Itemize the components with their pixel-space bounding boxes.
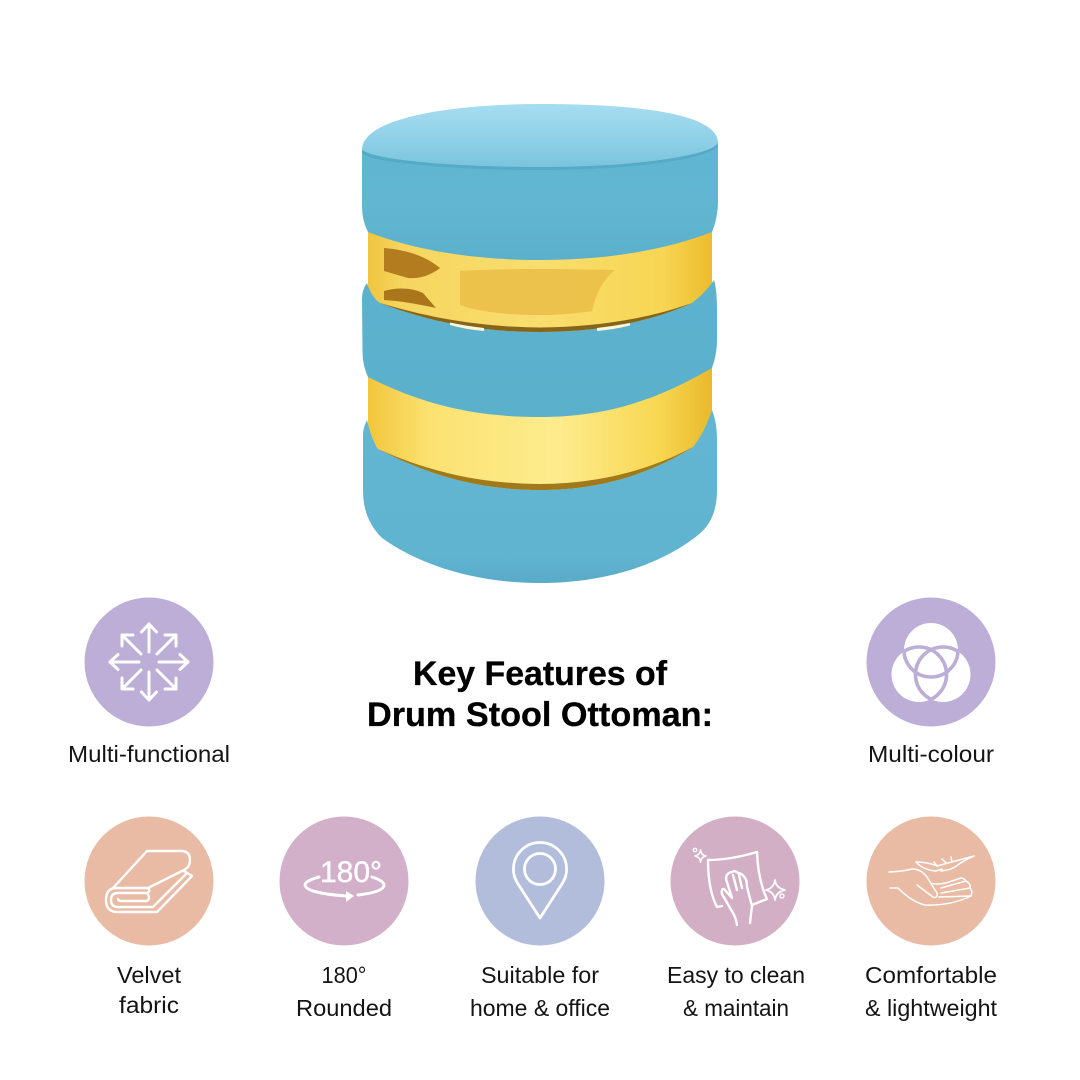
top cushion (362, 143, 718, 260)
icon: outward arrows (84, 598, 214, 726)
label: 180° (322, 962, 366, 988)
label: Rounded (296, 995, 392, 1021)
label: Suitable for (481, 962, 599, 988)
icon: hand wiping with cloth (670, 816, 800, 946)
title (367, 655, 713, 734)
label (667, 962, 805, 1021)
lower gold band (368, 360, 712, 495)
title: Drum Stool Ottoman: (367, 696, 713, 734)
middle cushion (362, 280, 717, 417)
label (296, 962, 392, 1021)
label: Multi-functional (68, 741, 230, 767)
feature: easy to clean (667, 816, 805, 1021)
feature: velvet fabric (84, 816, 214, 1018)
label (470, 962, 610, 1021)
icon: 180 degree rotation: 180° (320, 856, 382, 889)
product photo: drum stool ottoman (362, 104, 718, 583)
feature: multi-functional (68, 598, 230, 767)
lower band shadow edge (378, 447, 693, 490)
icon: overlapping circles (866, 598, 996, 726)
label: Easy to clean (667, 962, 805, 988)
icon: folded fabric (84, 816, 214, 946)
feature: suitable for home and office (470, 816, 610, 1021)
icon: 180 degree rotation (280, 816, 408, 946)
icon: hand with feather (866, 816, 996, 946)
upper gold band (368, 225, 712, 335)
feature: multi-colour (866, 598, 996, 767)
bottom cushion (363, 410, 717, 583)
feature: comfortable and lightweight (865, 816, 997, 1021)
label: fabric (119, 992, 179, 1018)
label: Velvet (117, 962, 181, 988)
label: home & office (470, 995, 610, 1021)
label (117, 962, 181, 1018)
label: Multi-colour (868, 741, 994, 767)
upper band shadow edge (380, 303, 692, 332)
title: Key Features of (413, 655, 668, 693)
label: & lightweight (865, 995, 997, 1021)
label: Comfortable (865, 962, 997, 988)
label: & maintain (683, 995, 789, 1021)
label (865, 962, 997, 1021)
feature: 180 rounded (280, 816, 408, 1021)
icon: location pin (476, 816, 604, 946)
